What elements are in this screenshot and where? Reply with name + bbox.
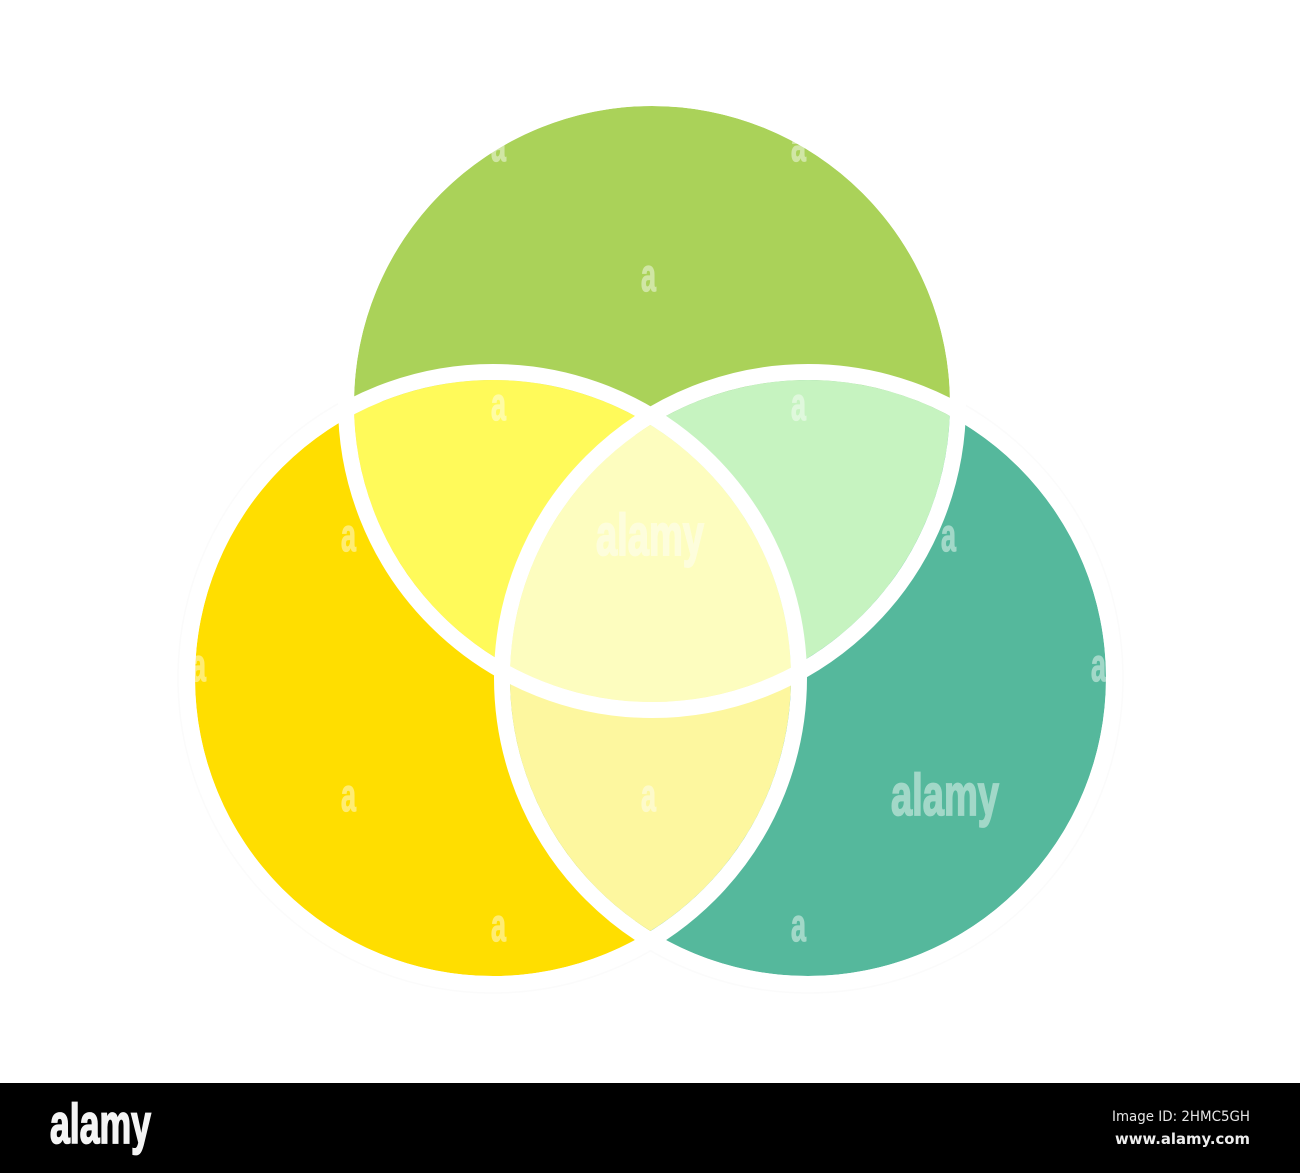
watermark: teal circle: alamy	[891, 763, 999, 828]
watermark small letters: a	[641, 769, 656, 821]
white circle outlines	[187, 98, 1114, 984]
overlap: center of all three	[510, 425, 791, 702]
watermark small letters: a	[491, 899, 506, 951]
watermark small letters: a	[341, 509, 356, 561]
watermark small letters: a	[791, 378, 806, 430]
footer logo: alamy	[50, 1092, 151, 1155]
watermark small letters: a	[191, 639, 206, 691]
watermark small letters	[191, 119, 1106, 951]
overlap: top and left	[354, 380, 650, 658]
circle: right teal	[510, 380, 1106, 976]
watermark: center: alamy	[596, 503, 704, 568]
watermark small letters: a	[491, 119, 506, 171]
watermark small letters: a	[791, 119, 806, 171]
watermark small letters: a	[791, 899, 806, 951]
watermark small letters: a	[1091, 639, 1106, 691]
overlap: left and right	[510, 425, 791, 931]
watermark small letters: a	[341, 769, 356, 821]
website: www.alamy.com	[1115, 1130, 1250, 1148]
watermark small letters: a	[491, 378, 506, 430]
faint outer halo of lower circles	[178, 363, 1123, 993]
circle: top green	[354, 106, 950, 702]
image id: Image ID: 2HMC5GH	[1112, 1109, 1250, 1125]
watermark small letters: a	[941, 509, 956, 561]
circle: left yellow	[195, 380, 791, 976]
overlap: top and right	[510, 380, 950, 668]
footer bar	[0, 1083, 1300, 1173]
watermark small letters: a	[641, 249, 656, 301]
